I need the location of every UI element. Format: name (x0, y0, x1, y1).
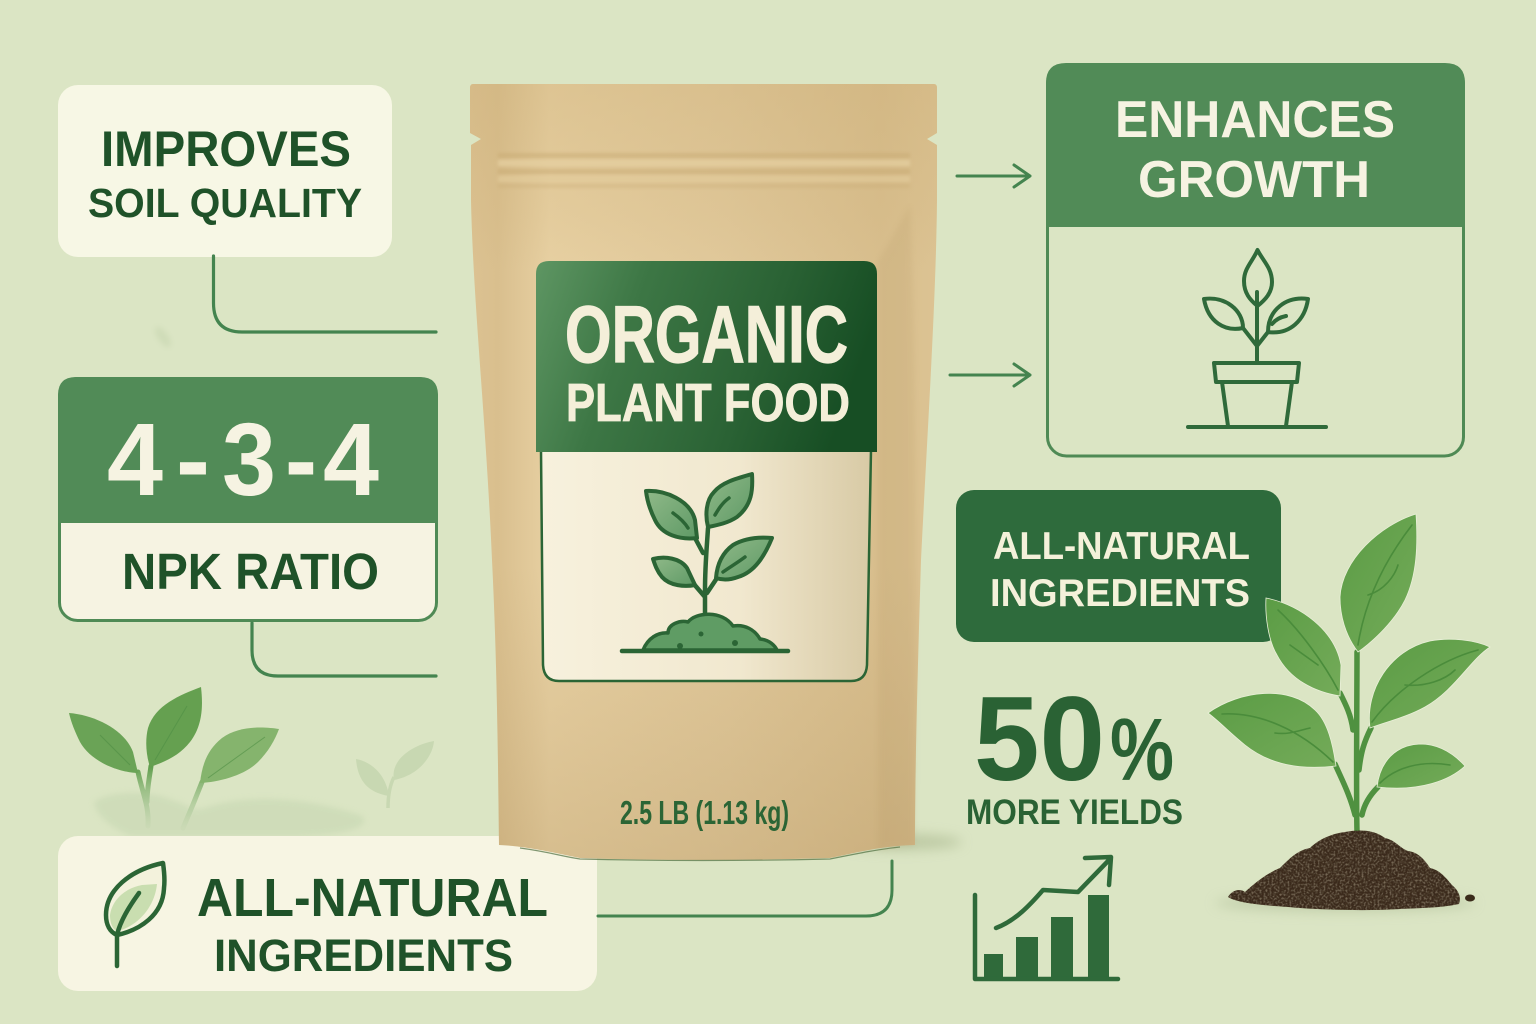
bag bottom edge (520, 847, 900, 860)
bag label: ORGANIC (565, 290, 848, 380)
panel: enhances growth: GROWTH (1138, 151, 1370, 209)
callout: all-natural ingredients (right): INGREDIENTS (990, 572, 1250, 615)
decorative sprout: faint (356, 741, 434, 808)
soil mound (1228, 830, 1475, 910)
NPK value: 3 (222, 402, 276, 517)
connector: ingredients to bag (598, 861, 892, 916)
icon: seedling in soil (622, 474, 788, 651)
bag label (536, 261, 877, 681)
callout: all-natural ingredients (bottom): INGREDIENTS (214, 930, 513, 981)
bag label: PLANT FOOD (566, 373, 850, 433)
connector: improves to bag (214, 256, 436, 332)
callout: improves soil quality: IMPROVES (101, 121, 351, 177)
callout: improves soil quality (58, 85, 392, 257)
NPK value: - (176, 402, 210, 517)
plant stems (1335, 652, 1378, 832)
NPK value: 4 (323, 402, 379, 517)
decorative sprouts: left (69, 687, 364, 836)
callout: improves soil quality: SOIL QUALITY (88, 180, 362, 226)
callout: NPK ratio (58, 377, 438, 620)
bag shadow (838, 834, 962, 850)
arrow: to growth header (957, 165, 1030, 187)
plant leaves (1208, 514, 1490, 788)
stat: 50% more yields: % (1110, 700, 1174, 799)
callout: all-natural ingredients (bottom) (58, 836, 597, 991)
faint smudge (152, 324, 174, 350)
icon: growth chart (975, 857, 1118, 979)
panel: enhances growth (1046, 63, 1465, 456)
icon: leaf (106, 863, 164, 966)
arrow: to growth icon (950, 364, 1030, 386)
leaf veins (1222, 525, 1478, 783)
NPK value: 4 (107, 402, 163, 517)
panel: enhances growth: ENHANCES (1115, 91, 1395, 149)
NPK value (107, 402, 379, 517)
bag seal ridges (498, 153, 916, 850)
icon: potted plant (1188, 250, 1326, 427)
product bag (470, 84, 937, 860)
connector: NPK to bag (252, 623, 436, 676)
callout: all-natural ingredients (right): ALL-NATURAL (993, 525, 1250, 568)
stat: 50% more yields (966, 672, 1183, 832)
stat: 50% more yields: MORE YIELDS (966, 793, 1183, 832)
callout: all-natural ingredients (right) (956, 490, 1281, 642)
stat: 50% more yields: 50 (974, 672, 1105, 806)
callout: all-natural ingredients (bottom): ALL-NATURAL (197, 868, 548, 928)
weight label: 2.5 LB (1.13 kg) (620, 794, 789, 831)
illustration: large plant in soil (1208, 514, 1490, 912)
callout: NPK ratio: NPK RATIO (122, 543, 379, 600)
NPK value: - (285, 402, 317, 517)
